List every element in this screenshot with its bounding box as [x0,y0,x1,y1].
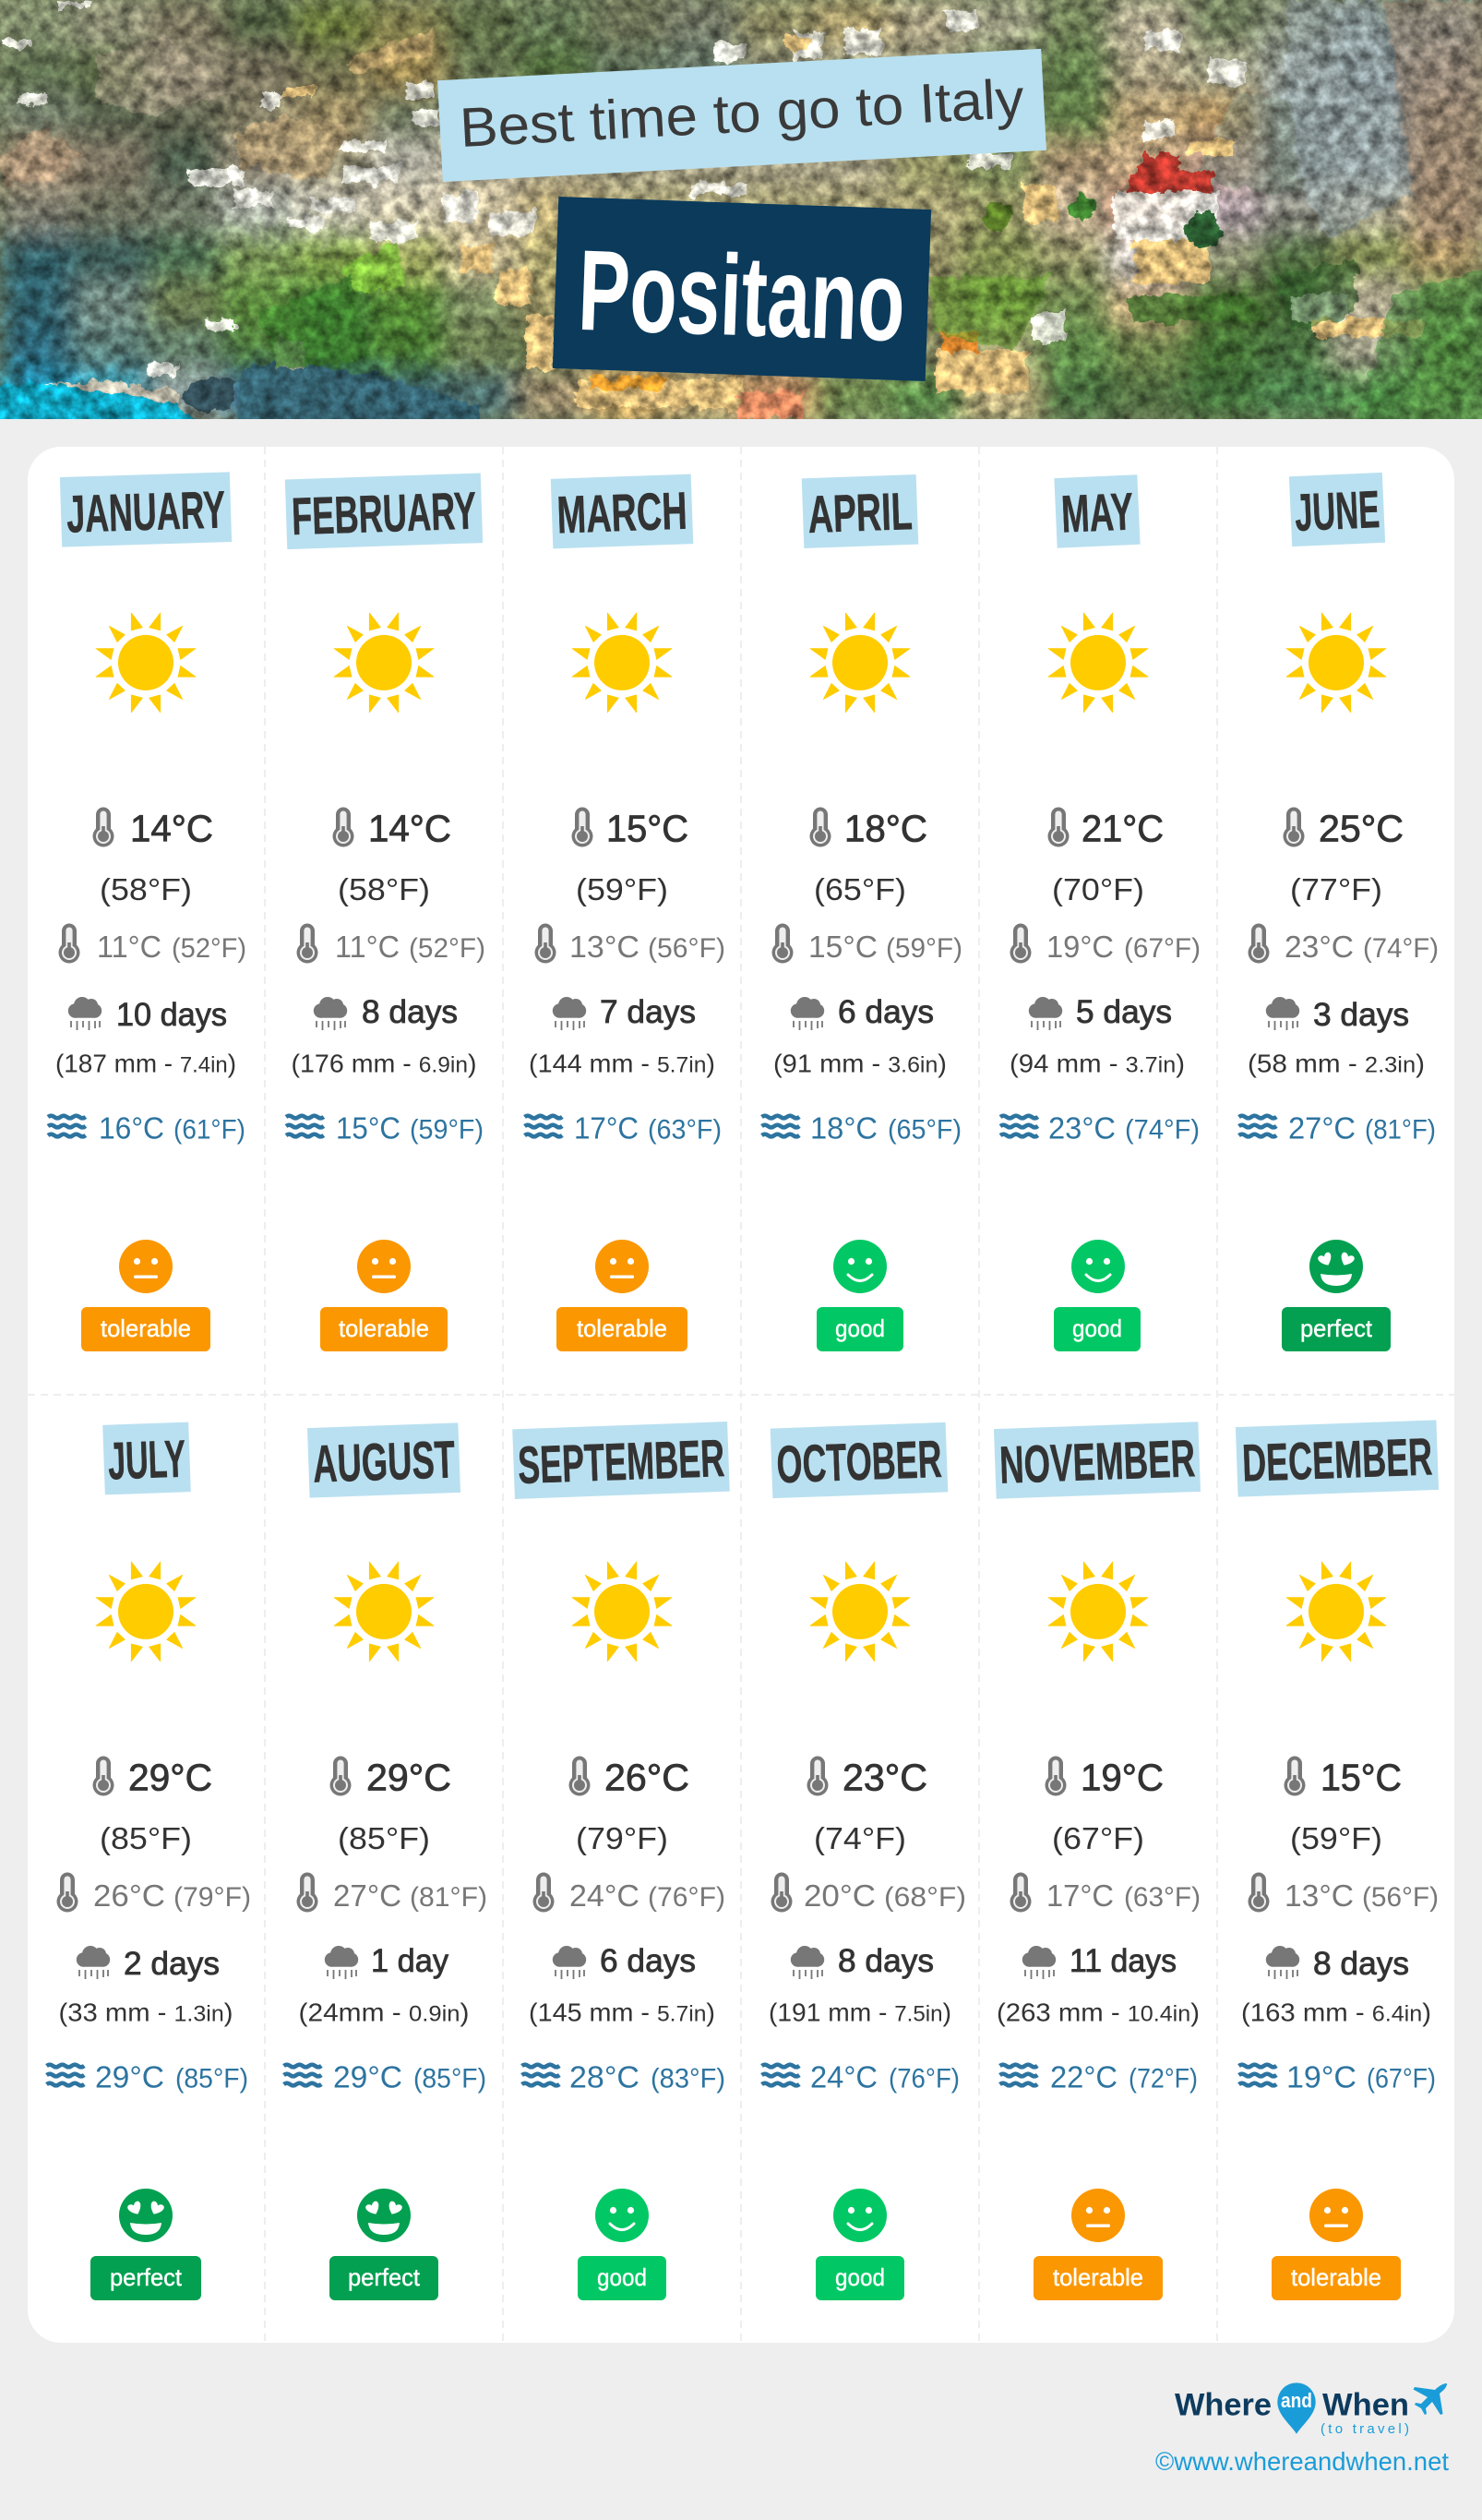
icon: rain cloud [553,997,586,1030]
sea temperature: 17°C [574,1110,639,1145]
icon: heart-eyes face [357,2189,411,2242]
high temperature: 25°C [1319,807,1404,849]
icon: sun [572,1562,672,1662]
logo: Where and When: Where [1175,2388,1272,2423]
low temperature fahrenheit: (79°F) [173,1882,251,1913]
icon: rain cloud [77,1946,110,1979]
month label [307,1422,460,1498]
panel: August [284,1422,487,2300]
rating badge [81,1307,210,1351]
icon: smiling face [1071,1240,1125,1293]
low temperature: 23°C [1285,930,1354,964]
rainfall: (144 mm - 5.7in) [529,1050,715,1078]
high temperature fahrenheit: (79°F) [576,1821,668,1855]
rating badge: good [597,2263,647,2291]
rating badge [817,1307,903,1351]
rating badge [320,1307,448,1351]
logo: Where and When: and [1281,2389,1312,2412]
rating badge [1054,1307,1141,1351]
low temperature fahrenheit: (52°F) [172,933,246,964]
high temperature fahrenheit: (59°F) [576,872,668,906]
high temperature fahrenheit: (58°F) [338,872,430,906]
sea temperature fahrenheit: (65°F) [888,1114,962,1145]
sea temperature: 16°C [99,1110,164,1145]
rating badge: good [835,1314,885,1342]
icon: rain cloud [791,997,824,1030]
icon: sun [810,613,910,713]
high temperature: 15°C [606,807,688,849]
icon: low thermometer [771,1872,792,1913]
icon: airplane [1414,2383,1447,2415]
sea temperature: 22°C [1050,2059,1117,2094]
high temperature fahrenheit: (77°F) [1290,872,1382,906]
high temperature fahrenheit: (58°F) [100,872,192,906]
month label [551,474,693,548]
icon: sun [96,1562,196,1662]
sea temperature fahrenheit: (63°F) [648,1114,722,1145]
rating badge: perfect [110,2263,183,2291]
icon: sea waves [522,2065,559,2085]
sea temperature: 29°C [333,2059,402,2094]
icon: low thermometer [535,923,556,964]
month label [285,474,483,549]
rating badge: perfect [348,2263,421,2291]
rating badge [556,1307,687,1351]
low temperature: 13°C [1285,1878,1354,1913]
low temperature: 19°C [1046,930,1114,964]
high temperature fahrenheit: (70°F) [1052,872,1144,906]
low temperature fahrenheit: (81°F) [410,1882,487,1913]
month label: AUGUST [312,1430,456,1494]
month label: MARCH [556,482,688,545]
icon: neutral face [1309,2189,1363,2242]
low temperature: 17°C [1046,1878,1114,1913]
rainfall: (191 mm - 7.5in) [769,1998,951,2027]
rainy days: 2 days [124,1946,220,1982]
high temperature: 14°C [368,807,451,849]
low temperature: 15°C [808,930,878,964]
sea temperature: 19°C [1286,2059,1357,2094]
month label [60,472,232,547]
rating badge: perfect [1300,1314,1373,1342]
high temperature: 19°C [1081,1756,1164,1798]
icon: rain cloud [1266,1946,1299,1979]
title banner: Positano: Positano [576,227,907,366]
icon: low thermometer [1010,923,1032,964]
month label: JULY [107,1430,186,1491]
icon: low thermometer [297,923,317,964]
rating badge [329,2256,438,2300]
low temperature: 13°C [569,930,639,964]
icon: thermometer [568,1756,591,1796]
icon: sun [810,1562,910,1662]
panel: October [762,1422,966,2300]
rating badge [1034,2256,1163,2300]
rainfall: (58 mm - 2.3in) [1248,1050,1425,1078]
sea temperature: 27°C [1288,1110,1356,1145]
heading banner: Best time to go to Italy: Best time to go to Italy [459,67,1025,159]
sea temperature fahrenheit: (76°F) [889,2063,960,2094]
rainfall: (187 mm - 7.4in) [55,1050,236,1078]
icon: smiling face [595,2189,649,2242]
rating badge: good [835,2263,885,2291]
month label [802,474,918,548]
sea temperature fahrenheit: (72°F) [1129,2063,1198,2094]
month label: APRIL [807,482,914,545]
icon: low thermometer [1248,1872,1270,1913]
rainfall: (94 mm - 3.7in) [1010,1050,1185,1078]
rainy days: 10 days [116,997,227,1033]
month label: MAY [1060,482,1134,545]
rainy days: 8 days [362,994,458,1030]
rating badge: tolerable [101,1314,191,1342]
icon: sun [1048,1562,1148,1662]
icon: thermometer [572,807,592,847]
panel: July [46,1422,251,2300]
icon: low thermometer [533,1872,554,1913]
high temperature fahrenheit: (85°F) [338,1821,430,1855]
sea temperature: 15°C [336,1110,400,1145]
rainy days: 11 days [1070,1943,1177,1979]
hero photo: Positano cliffside town [0,0,1482,456]
icon: sea waves [1238,2065,1276,2085]
month label [1054,474,1141,548]
icon: sun [1048,613,1148,713]
icon: low thermometer [59,923,79,964]
rating badge [578,2256,666,2300]
panel: September [512,1422,730,2300]
icon: thermometer [330,1756,351,1796]
rainfall: (33 mm - 1.3in) [59,1998,233,2027]
sea temperature fahrenheit: (83°F) [651,2063,725,2094]
high temperature fahrenheit: (85°F) [100,1821,192,1855]
rainy days: 8 days [838,1943,934,1979]
icon: thermometer [92,1756,114,1796]
low temperature fahrenheit: (68°F) [884,1882,966,1913]
rainy days: 1 day [371,1943,448,1979]
rainfall: (263 mm - 10.4in) [997,1998,1200,2027]
icon: thermometer [92,807,114,847]
low temperature fahrenheit: (67°F) [1124,933,1201,964]
icon: neutral face [595,1240,649,1293]
icon: low thermometer [297,1872,317,1913]
rating badge: tolerable [339,1314,429,1342]
high temperature fahrenheit: (65°F) [814,872,906,906]
rating badge: good [1072,1314,1122,1342]
month label [994,1422,1201,1499]
panel: June [1238,473,1439,1351]
icon: sun [334,613,434,713]
icon: rain cloud [314,997,347,1030]
icon: sea waves [762,1116,799,1136]
rainfall: (163 mm - 6.4in) [1241,1998,1431,2027]
month label: SEPTEMBER [517,1429,725,1495]
low temperature: 24°C [569,1878,639,1913]
high temperature: 23°C [843,1756,927,1798]
low temperature fahrenheit: (56°F) [648,933,725,964]
high temperature: 15°C [1321,1756,1402,1798]
heading banner: Best time to go to Italy [437,49,1046,182]
rating badge: tolerable [577,1314,667,1342]
high temperature: 29°C [128,1756,212,1798]
icon: sun [572,613,672,713]
sea temperature fahrenheit: (85°F) [175,2063,248,2094]
icon: sea waves [1238,1116,1276,1136]
panel: April [762,474,962,1351]
rating badge: tolerable [1291,2263,1381,2291]
high temperature: 29°C [366,1756,451,1798]
low temperature: 27°C [333,1878,401,1913]
sea temperature fahrenheit: (74°F) [1125,1114,1200,1145]
month label: FEBRUARY [291,482,477,546]
title banner: Positano [553,197,931,381]
low temperature fahrenheit: (76°F) [648,1882,725,1913]
panel: January [48,472,246,1351]
month label [1289,473,1385,546]
high temperature fahrenheit: (74°F) [814,1821,906,1855]
low temperature: 26°C [93,1878,165,1913]
rating badge [1282,1307,1391,1351]
icon: sea waves [284,2065,321,2085]
icon: sun [96,613,196,713]
website credit: ©www.whereandwhen.net [1155,2447,1449,2476]
icon: low thermometer [1248,923,1270,964]
icon: thermometer [1285,1756,1305,1796]
icon: sea waves [286,1116,324,1136]
month label [102,1422,191,1494]
rating badge [816,2256,904,2300]
high temperature fahrenheit: (67°F) [1052,1821,1144,1855]
month label [771,1422,948,1498]
sea temperature: 24°C [810,2059,878,2094]
sea temperature fahrenheit: (67°F) [1367,2063,1436,2094]
sea temperature: 29°C [95,2059,164,2094]
icon: thermometer [807,1756,829,1796]
high temperature: 21°C [1082,807,1164,849]
low temperature: 11°C [97,930,161,964]
panel: February [285,474,485,1351]
icon: thermometer [1048,807,1069,847]
icon: rain cloud [68,997,102,1030]
icon: neutral face [357,1240,411,1293]
month label: NOVEMBER [998,1429,1196,1495]
icon: sea waves [1000,1116,1038,1136]
icon: rain cloud [325,1946,358,1979]
month label [512,1422,730,1499]
icon: sea waves [524,1116,562,1136]
rainfall: (91 mm - 3.6in) [773,1050,947,1078]
low temperature fahrenheit: (74°F) [1363,933,1439,964]
rating badge [1272,2256,1401,2300]
icon: rain cloud [1266,997,1299,1030]
month label: JANUARY [66,480,226,545]
icon: heart-eyes face [119,2189,173,2242]
sea temperature: 23°C [1048,1110,1116,1145]
sea temperature fahrenheit: (61°F) [173,1114,245,1145]
low temperature fahrenheit: (63°F) [1124,1882,1201,1913]
icon: sea waves [46,2065,84,2085]
rainy days: 8 days [1313,1946,1409,1982]
icon: smiling face [833,2189,887,2242]
icon: thermometer [1283,807,1305,847]
sea temperature: 18°C [810,1110,878,1145]
icon: rain cloud [1029,997,1062,1030]
rainy days: 6 days [600,1943,696,1979]
rainy days: 5 days [1076,994,1172,1030]
high temperature: 18°C [844,807,927,849]
sea temperature fahrenheit: (59°F) [410,1114,484,1145]
low temperature: 20°C [804,1878,876,1913]
panel: monthly weather table [28,447,1454,2343]
rainfall: (145 mm - 5.7in) [529,1998,715,2027]
icon: rain cloud [1022,1946,1056,1979]
month label: OCTOBER [775,1430,943,1494]
icon: sun [334,1562,434,1662]
panel: May [1000,474,1201,1351]
icon: sea waves [762,2065,799,2085]
icon: low thermometer [57,1872,78,1913]
icon: low thermometer [771,923,794,964]
rainy days: 3 days [1313,997,1409,1033]
rainy days: 6 days [838,994,934,1030]
icon: low thermometer [1010,1872,1032,1913]
icon: neutral face [1071,2189,1125,2242]
rainfall: (176 mm - 6.9in) [292,1050,476,1078]
sea temperature fahrenheit: (85°F) [413,2063,486,2094]
logo: Where and When: When [1322,2388,1409,2423]
panel: March [524,474,725,1351]
rainy days: 7 days [600,994,696,1030]
icon: thermometer [810,807,831,847]
month label: JUNE [1294,480,1380,543]
icon: thermometer [1045,1756,1067,1796]
icon: smiling face [833,1240,887,1293]
icon: rain cloud [553,1946,586,1979]
icon: sun [1286,613,1386,713]
icon: map pin [1277,2382,1316,2434]
sea temperature: 28°C [569,2059,639,2094]
high temperature fahrenheit: (59°F) [1290,1821,1382,1855]
rainfall: (24mm - 0.9in) [299,1998,469,2027]
icon: sea waves [1000,2065,1037,2085]
panel: December [1236,1420,1439,2300]
rating badge: tolerable [1053,2263,1143,2291]
low temperature fahrenheit: (56°F) [1362,1882,1439,1913]
low temperature fahrenheit: (59°F) [886,933,962,964]
rating badge [90,2256,201,2300]
icon: sun [1286,1562,1386,1662]
high temperature: 14°C [130,807,213,849]
icon: neutral face [119,1240,173,1293]
logo: Where and When: (to travel) [1321,2421,1409,2437]
low temperature fahrenheit: (52°F) [409,933,485,964]
icon: heart-eyes face [1309,1240,1363,1293]
logo: Where and When [1175,2382,1447,2437]
sea temperature fahrenheit: (81°F) [1365,1114,1436,1145]
icon: thermometer [332,807,354,847]
icon: rain cloud [791,1946,824,1979]
low temperature: 11°C [335,930,400,964]
panel: November [994,1422,1201,2300]
high temperature: 26°C [604,1756,689,1798]
icon: sea waves [48,1116,86,1136]
